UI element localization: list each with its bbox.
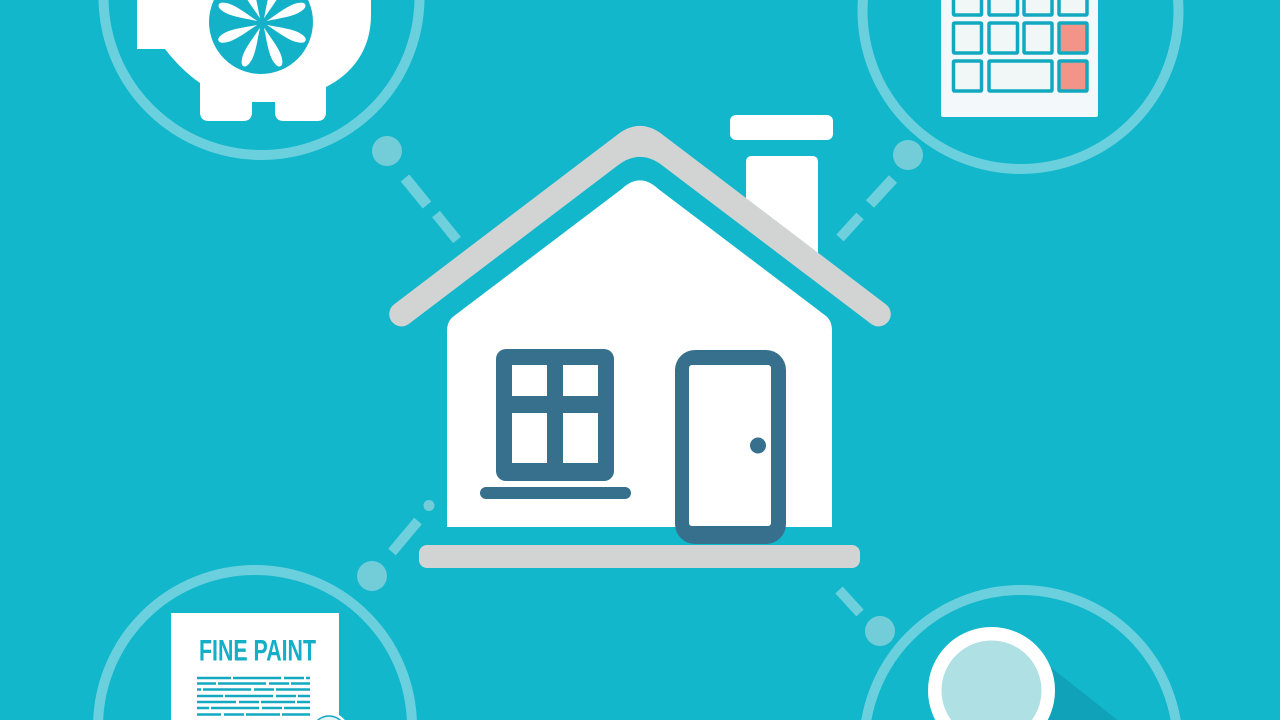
icon: fan wheel [209,0,313,74]
icon: magnifying glass [935,634,1048,720]
house body [447,180,832,527]
heading: fine print: FINE PAINT [199,634,316,668]
panel: calculator circle [862,0,1178,169]
chimney [730,115,833,266]
door [675,350,786,544]
house [389,115,891,568]
connector: top right [840,140,923,238]
panel: fine print circle [98,570,412,720]
panel: magnifying glass circle [864,590,1178,720]
door knob [750,438,766,454]
icon: furnace blower housing [137,0,371,121]
document body lines [197,678,310,714]
icon: calculator [941,0,1098,117]
calculator: highlighted keys [1059,23,1087,91]
icon: contract document [171,613,348,720]
connector: bottom left [357,500,434,591]
connector: top left [372,136,457,240]
panel: turbine fan circle [104,0,420,155]
window sill [480,487,631,499]
window [496,349,614,481]
icon: small magnifier [310,714,348,720]
floor slab [419,545,860,568]
icon: magnifier shadow [1030,665,1120,720]
connector: bottom right [839,590,895,646]
roof [389,126,891,326]
